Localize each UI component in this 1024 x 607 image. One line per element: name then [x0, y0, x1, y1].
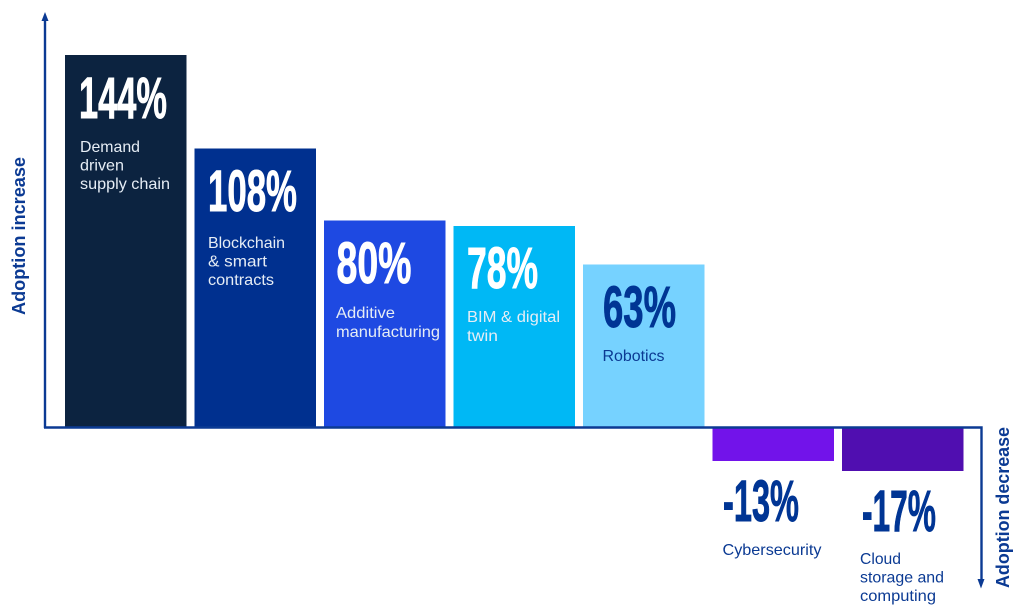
bar: cybersecurity -13%: -13%: [723, 469, 799, 534]
bar: additive manufacturing 80%: Additive: [336, 305, 395, 322]
bar: demand driven supply chain 144%: driven: [80, 158, 124, 174]
bar: cloud storage and computing -17%: -17%: [862, 479, 936, 544]
bar: robotics 63%: 63%: [603, 275, 676, 340]
bar: BIM and digital twin 78%: twin: [467, 328, 498, 345]
bar: additive manufacturing 80%: [324, 220, 446, 427]
bar: cloud storage and computing -17%: Cloud: [860, 551, 901, 568]
bar: additive manufacturing 80%: 80%: [336, 231, 412, 296]
bar: BIM and digital twin 78%: 78%: [467, 236, 538, 301]
bar: blockchain and smart contracts 108%: contracts: [208, 272, 274, 289]
bar: demand driven supply chain 144%: supply chain: [80, 176, 170, 193]
bar: blockchain and smart contracts 108%: [194, 148, 316, 427]
bar: cybersecurity -13%: [712, 427, 834, 559]
bar: blockchain and smart contracts 108%: Blockchain: [208, 235, 285, 252]
axis label: adoption increase: Adoption increase: [8, 157, 29, 315]
bar: demand driven supply chain 144%: 144%: [79, 66, 167, 131]
bar: blockchain and smart contracts 108%: 108%: [208, 159, 297, 224]
bar: additive manufacturing 80%: manufacturing: [336, 324, 440, 341]
bar: cybersecurity -13%: Cybersecurity: [722, 542, 822, 559]
bar: cloud storage and computing -17%: storage and: [860, 570, 944, 586]
bar: BIM and digital twin 78%: [454, 226, 575, 427]
axis label: adoption decrease: Adoption decrease: [992, 427, 1013, 588]
bar: BIM and digital twin 78%: BIM & digital: [467, 309, 560, 326]
bar: robotics 63%: [583, 264, 704, 427]
bar: demand driven supply chain 144%: [65, 55, 186, 427]
bar: blockchain and smart contracts 108%: & smart: [208, 254, 268, 270]
bar: demand driven supply chain 144%: Demand: [80, 139, 140, 156]
bar: cloud storage and computing -17%: computing: [860, 588, 936, 605]
bar: robotics 63%: Robotics: [602, 348, 664, 365]
bar: cloud storage and computing -17%: [842, 427, 964, 605]
